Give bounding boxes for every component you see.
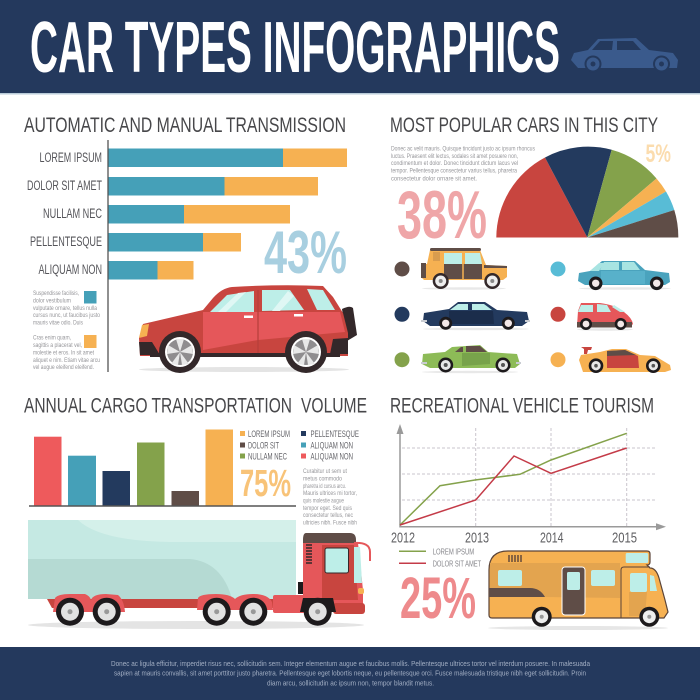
legend: cargo: DOLOR SIT [248, 440, 279, 452]
stacked bar chart: NULLAM NEC [43, 206, 102, 221]
header banner [0, 0, 700, 94]
legend: transmission: aliquet e nim. Etiam vitae arcu [33, 357, 100, 364]
icon: header car silhouette [571, 38, 678, 72]
legend: transmission: mauris vitae odio. Duis [33, 320, 83, 326]
footer text: Donec ac ligula efficitur, imperdiet risus nec, sollicitudin sem. Integer elementum augue et faucibus mollis. Pellentesque ultrices tortor vel interdum posuere. In malesuada [111, 659, 591, 668]
key dot: orange [550, 352, 566, 367]
paragraph: cargo: tempor eget. Sed quis [303, 505, 352, 512]
icon: navy sedan [421, 302, 530, 330]
paragraph: cargo: consectetur tellus, nec [303, 512, 354, 519]
legend: cargo: NULLAM NEC [248, 452, 287, 462]
line chart: 2015 [612, 529, 637, 546]
line chart: 2012 [391, 529, 415, 546]
paragraph: popular cars: Donec ac velit mauris. Quisque tincidunt justo ac ipsum rhoncus [391, 146, 535, 152]
legend: transmission: vulputate ornare, tellus nulla [33, 305, 97, 312]
legend: cargo: ALIQUAM NON [310, 452, 353, 462]
percent 75%: 75% [240, 463, 291, 505]
panel: annual cargo transportation [24, 395, 370, 629]
footer banner [0, 647, 700, 700]
icon: red minivan [577, 303, 633, 331]
paragraph: popular cars: tempor. Pellentesque consectetur varius tellus, pharetra [391, 168, 517, 174]
line chart: 2014 [540, 529, 564, 546]
paragraph: popular cars: consectetur dolor ornare sit amet. [391, 176, 477, 182]
legend: transmission: Cras enim quam, [33, 334, 71, 342]
paragraph: popular cars: condimentum et dolor. Donec tincidunt dictum lacus vel [391, 160, 518, 167]
legend: transmission: cursus nunc, ut faucibus justo [33, 312, 100, 319]
icon: blue hatchback [578, 261, 671, 290]
paragraph: popular cars: luctus. Praesent elit lectus, sodales sit amet posuere non, [391, 153, 518, 160]
paragraph: cargo: ultricies nibh. Fusce nibh [303, 520, 357, 526]
illustration: camper van [488, 551, 668, 630]
heading: volume: VOLUME [301, 395, 367, 418]
legend: transmission: sagittis a placerat vel, [33, 342, 82, 349]
legend: cargo: ALIQUAM NON [310, 440, 353, 452]
paragraph: cargo: Mauris ultrices mi tortor, [303, 490, 357, 497]
legend: transmission: Suspendisse facilisis, [33, 290, 79, 297]
paragraph: cargo: metus commodo [303, 476, 342, 482]
key dot: navy [394, 307, 410, 322]
line chart: 2013 [465, 529, 489, 546]
paragraph: cargo: Curabitur ut sem ut [303, 468, 347, 475]
legend: transmission: dolor vestibulum [33, 298, 71, 304]
stacked bar chart [27, 140, 347, 372]
stacked bar chart: ALIQUAM NON [38, 262, 102, 277]
legend: tourism [399, 548, 481, 569]
footer text: sapien at mauris convallis, sit amet porttitor justo pharetra. Pellentesque eget lobortis neque, eu pellentesque orci. Fusce malesuada tristique nibh eget sollicitudin. Proin [114, 669, 586, 678]
legend: cargo: LOREM IPSUM [248, 429, 290, 440]
illustration: red SUV [139, 285, 357, 373]
stacked bar chart: LOREM IPSUM [40, 150, 102, 165]
icon: orange wagon [421, 248, 507, 290]
paragraph: cargo [303, 468, 357, 526]
key dot: light blue [550, 262, 566, 276]
legend: cargo [240, 429, 359, 462]
stacked bar chart: DOLOR SIT AMET [27, 178, 102, 193]
key dot: brown [394, 262, 410, 276]
percent 43%: 43% [264, 219, 347, 286]
heading: transmission: AUTOMATIC AND MANUAL TRANSMISSION [24, 114, 346, 137]
semicircle pie chart [496, 147, 678, 238]
percent 38%: 38% [397, 177, 487, 253]
legend: tourism: LOREM IPSUM [433, 548, 474, 556]
paragraph: cargo: pharetra id cursus arcu. [303, 483, 346, 490]
key dot: green [394, 352, 410, 367]
legend: transmission [33, 290, 100, 371]
footer text [111, 659, 591, 687]
paragraph: popular cars [391, 146, 535, 182]
line chart [391, 424, 666, 546]
illustration: truck [28, 520, 370, 629]
legend: cargo: PELLENTESQUE [310, 429, 359, 440]
stacked bar chart: PELLENTESQUE [30, 234, 102, 249]
percent 5%: 5% [646, 140, 671, 168]
icon: sports car [579, 347, 671, 373]
key dot: red [550, 307, 566, 322]
heading: cargo: ANNUAL CARGO TRANSPORTATION [24, 395, 292, 418]
legend: transmission: vel augue eleifend eleifend. [33, 364, 94, 371]
percent 25%: 25% [400, 566, 476, 631]
paragraph: cargo: quis molestie augue [303, 498, 344, 504]
panel: most popular cars [390, 114, 678, 373]
icon: green coupe [421, 345, 521, 373]
bar chart: cargo [29, 430, 296, 506]
panel: recreational vehicle tourism [390, 395, 668, 631]
panel: automatic and manual transmission [24, 114, 357, 373]
legend: tourism: DOLOR SIT AMET [433, 560, 481, 569]
legend: transmission: molestie et eros. In sit amet [33, 350, 94, 356]
footer text: diam arcu, sollicitudin ac ipsum non, tempor blandit metus. [267, 678, 434, 687]
